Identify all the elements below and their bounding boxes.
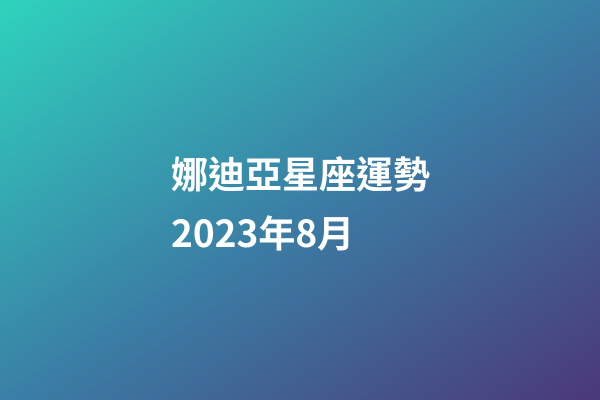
title line: name: 娜迪亞星座運勢 <box>171 145 430 199</box>
title <box>171 145 430 258</box>
title line: date: 2023年8月 <box>171 204 354 258</box>
